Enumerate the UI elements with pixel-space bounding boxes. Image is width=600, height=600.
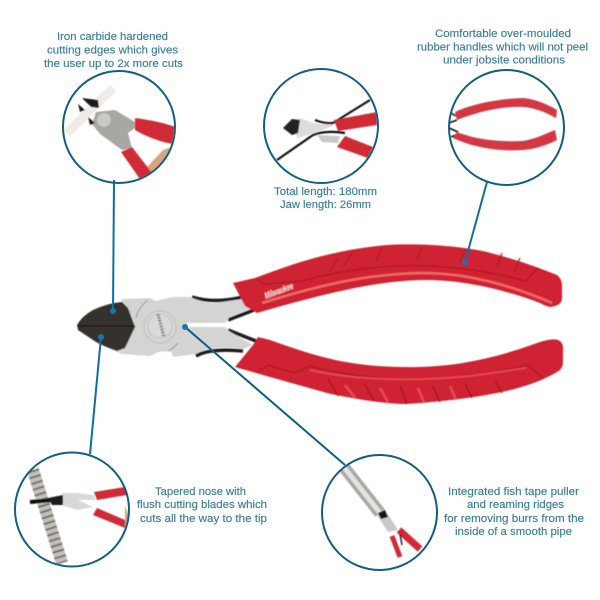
- jaw cutting line: [78, 325, 135, 327]
- caption: Integrated fish tape puller: [448, 486, 579, 498]
- caption: Iron carbide hardened: [57, 31, 168, 43]
- callout: dimensions: [264, 69, 378, 211]
- caption: flush cutting blades which: [137, 499, 267, 511]
- caption: [137, 486, 267, 525]
- circle photo: red handles: [449, 98, 557, 150]
- circle outline: [15, 452, 129, 566]
- circle photo: cutting a wire: [67, 88, 175, 182]
- circle photo: pipe reaming: [343, 466, 420, 557]
- circle photo: pliers with wire: [277, 100, 377, 160]
- caption: for removing burrs from the: [444, 513, 584, 525]
- caption: Total length: 180mm: [274, 186, 377, 198]
- main pliers illustration: [77, 244, 563, 404]
- caption: Tapered nose with: [155, 486, 246, 498]
- circle outline: [449, 70, 564, 185]
- black cutting jaw: [77, 302, 135, 351]
- callout: handles: [417, 28, 588, 185]
- pivot with logo: [136, 300, 178, 351]
- callout leader lines: [90, 180, 487, 465]
- circle outline: [264, 69, 378, 183]
- caption: [274, 186, 377, 211]
- caption: rubber handles which will not peel: [417, 42, 588, 54]
- circle outline: [63, 71, 175, 183]
- caption: [44, 31, 184, 70]
- silver head and arms: [112, 297, 253, 357]
- circle photo: cutting threaded rod: [30, 470, 130, 563]
- caption: and reaming ridges: [467, 499, 565, 511]
- callout: tapered nose: [15, 452, 267, 566]
- caption: Jaw length: 26mm: [280, 199, 371, 211]
- caption: under jobsite conditions: [443, 54, 566, 66]
- callout anchor dots: [98, 259, 468, 340]
- upper red handle: [233, 244, 562, 313]
- caption: cutting edges which gives: [47, 44, 179, 56]
- black wire guards: [192, 297, 256, 356]
- callout: cutting edges: [44, 31, 184, 183]
- brand label: Milwaukee: [263, 281, 295, 301]
- callout: fish tape puller: [322, 455, 584, 570]
- caption: [444, 486, 584, 538]
- caption: inside of a smooth pipe: [455, 526, 572, 538]
- caption: cuts all the way to the tip: [140, 513, 267, 525]
- caption: Comfortable over-moulded: [435, 28, 571, 40]
- circle outline: [322, 455, 437, 570]
- lower red handle: [235, 337, 563, 404]
- caption: the user up to 2x more cuts: [44, 58, 184, 70]
- caption: [417, 28, 588, 66]
